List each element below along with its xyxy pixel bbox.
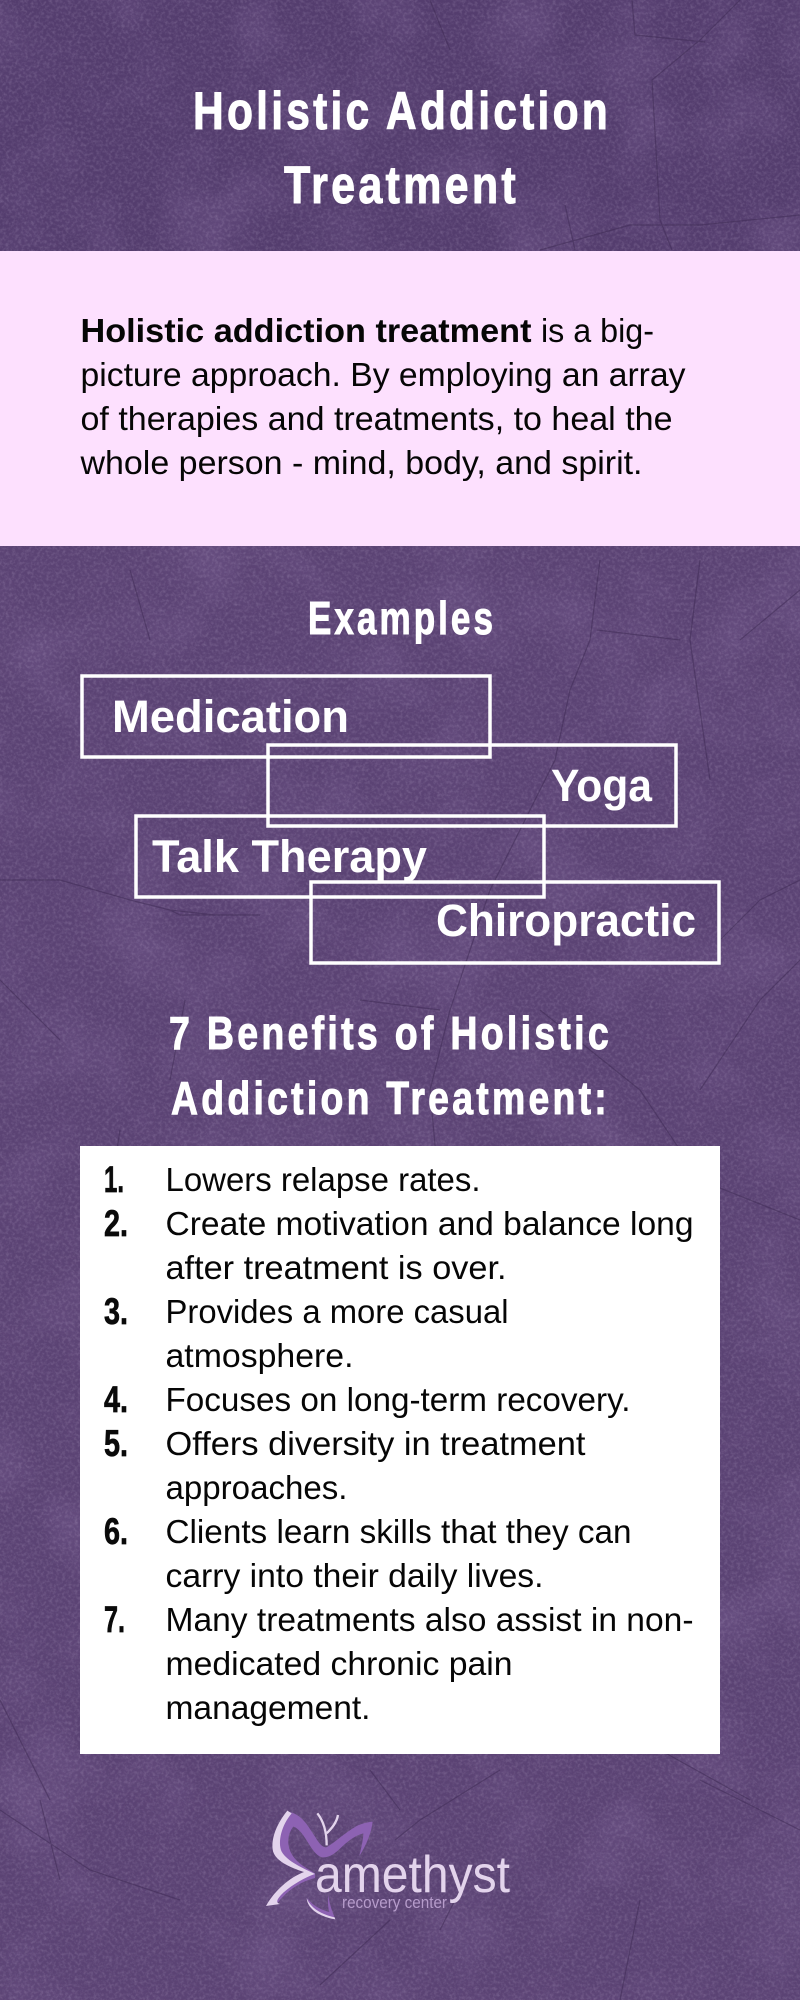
benefit 3: Provides a more casual [166,1293,508,1330]
benefit 3: 3. [104,1291,128,1332]
benefit 6 [104,1511,632,1594]
example: medication: Medication [112,691,349,742]
tagline: recovery center [342,1893,447,1912]
intro text: picture approach. By employing an array [80,356,686,393]
examples group [82,676,719,963]
panel: benefits list [80,1146,720,1754]
benefit 7: Many treatments also assist in non- [166,1601,694,1638]
benefit 6: 6. [104,1511,128,1552]
benefit 7: 7. [104,1599,125,1640]
benefit 5: Offers diversity in treatment [166,1425,586,1462]
benefit 2: 2. [104,1203,128,1244]
logo: amethyst recovery center [266,1811,510,1919]
benefit 7: medicated chronic pain [166,1645,512,1682]
example: chiropractic [311,882,719,963]
panel: intro [0,251,800,546]
benefit 2: Create motivation and balance long [166,1205,694,1242]
example: talk therapy: Talk Therapy [152,831,427,882]
example: yoga: Yoga [551,760,653,811]
intro text: Holistic addiction treatment [80,312,532,349]
wordmark: amethyst [315,1846,510,1904]
benefit 3 [104,1291,508,1374]
example: medication [82,676,490,757]
benefit 7 [104,1599,694,1726]
benefit 5: 5. [104,1423,128,1464]
intro text: is a big- [541,312,654,349]
benefit 2: after treatment is over. [166,1249,506,1286]
intro text: of therapies and treatments, to heal the [80,400,672,437]
example: chiropractic: Chiropractic [436,895,696,946]
heading: examples: Examples [308,592,496,644]
heading: benefits: Addiction Treatment: [171,1072,610,1124]
title: Treatment [284,156,519,215]
benefit 4: 4. [104,1379,128,1420]
example: talk therapy [136,816,544,897]
title: Holistic Addiction [193,82,611,141]
benefit 4: Focuses on long-term recovery. [166,1381,630,1418]
benefit 6: Clients learn skills that they can [166,1513,632,1550]
intro text [79,312,686,481]
benefit 7: management. [166,1689,370,1726]
benefit 5 [104,1423,586,1506]
example: yoga [268,745,676,826]
heading: benefits: 7 Benefits of Holistic [169,1007,612,1059]
icon: butterfly [266,1811,373,1919]
benefit 2 [104,1203,694,1286]
benefit 1: Lowers relapse rates. [166,1161,480,1198]
heading: benefits [169,1007,612,1124]
benefit 6: carry into their daily lives. [166,1557,544,1594]
benefit 5: approaches. [166,1469,348,1506]
title [193,82,611,215]
intro text: whole person - mind, body, and spirit. [79,444,642,481]
benefit 3: atmosphere. [166,1337,354,1374]
benefit 1: 1. [104,1159,124,1200]
